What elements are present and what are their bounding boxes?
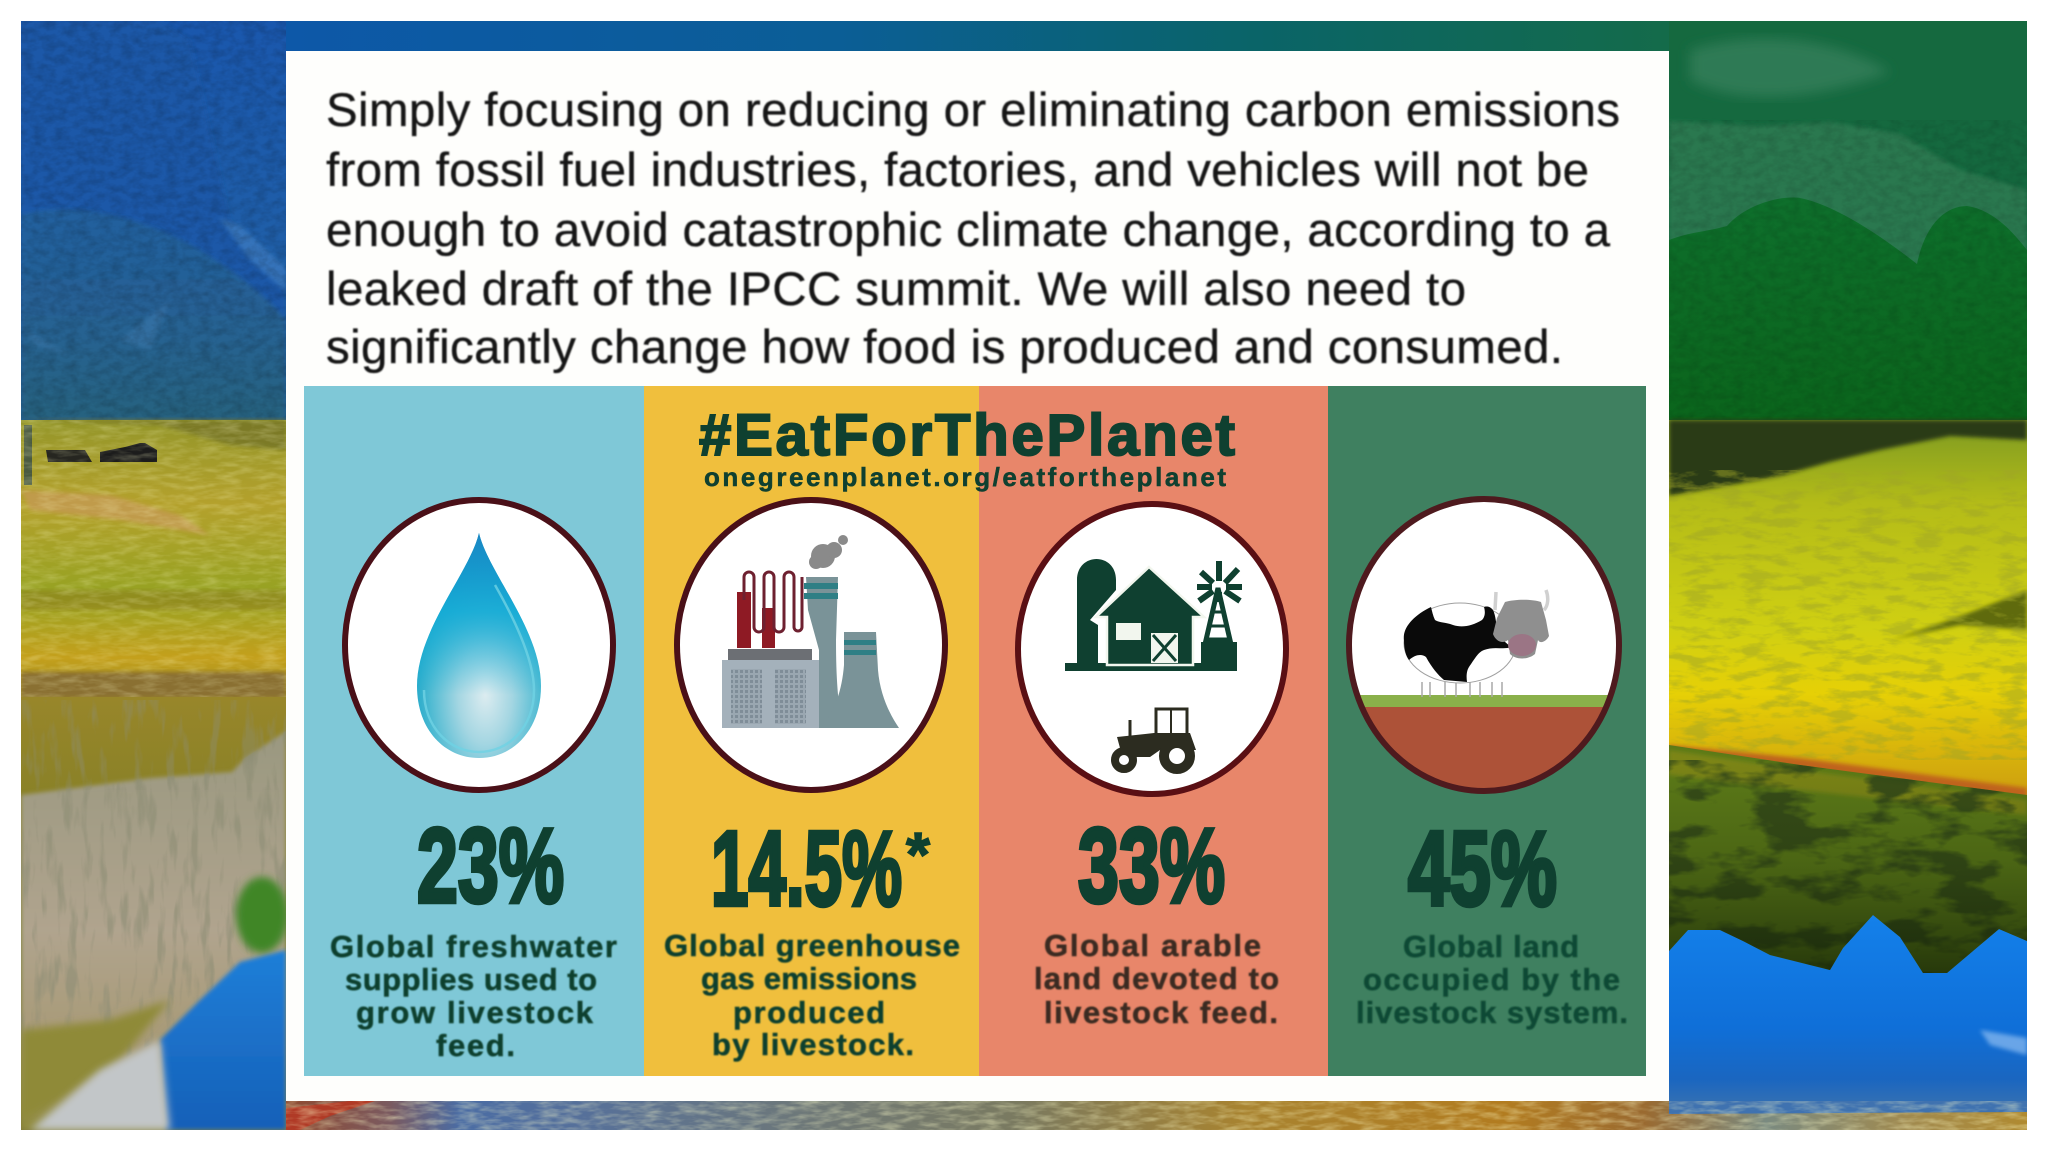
caption: freshwater: supplies used to	[345, 962, 597, 997]
background: right lake with tree reflection	[1669, 745, 2027, 1110]
caption: arable land: Global arable	[1044, 928, 1261, 963]
caption: freshwater	[330, 929, 617, 1063]
infographic panel	[304, 386, 1646, 1076]
caption: freshwater: Global freshwater	[330, 929, 617, 964]
cow head	[1493, 600, 1549, 658]
panel: greenhouse gas column	[644, 386, 979, 1076]
caption: land occupied: occupied by the	[1363, 962, 1620, 997]
red chimneys	[737, 592, 775, 648]
stat: 23%: 23%	[417, 807, 564, 925]
panel: land occupied column	[1328, 386, 1646, 1076]
panel: arable land column	[979, 386, 1328, 1076]
roof and building	[728, 649, 812, 660]
background: bottom grass strip	[286, 1101, 2027, 1130]
caption: freshwater: grow livestock	[356, 995, 594, 1030]
caption: arable land: livestock feed.	[1044, 995, 1278, 1030]
stat: 14.5%*: *	[906, 821, 931, 890]
caption: land occupied	[1356, 929, 1628, 1030]
icon: farm in circle	[1018, 504, 1286, 794]
caption: greenhouse	[664, 928, 960, 1062]
caption: greenhouse: by livestock.	[712, 1027, 914, 1062]
short tower	[820, 632, 899, 728]
caption: freshwater: feed.	[436, 1028, 515, 1063]
caption: arable land: land devoted to	[1034, 961, 1279, 996]
heading: hashtag: #EatForThePlanet	[699, 403, 1235, 468]
caption: greenhouse: Global greenhouse	[664, 928, 960, 963]
panel: freshwater column	[304, 386, 644, 1076]
background: top band gradient	[286, 21, 1669, 51]
intro paragraph: leaked draft of the IPCC summit. We will also need to	[326, 263, 1466, 316]
tall stack	[806, 577, 842, 728]
background: right meadow	[1669, 420, 2027, 806]
pipes	[744, 572, 802, 632]
caption: greenhouse: produced	[733, 995, 885, 1030]
stat: 14.5%*: 14.5%	[711, 810, 902, 928]
intro paragraph: significantly change how food is produced and consumed.	[326, 321, 1563, 374]
cow body	[1404, 603, 1516, 683]
white card	[286, 51, 1669, 1101]
caption: land occupied: Global land	[1403, 929, 1579, 964]
intro paragraph: Simply focusing on reducing or eliminating carbon emissions	[326, 84, 1620, 137]
caption: greenhouse: gas emissions	[701, 961, 917, 996]
icon: factory in circle	[677, 500, 945, 790]
stat: 33%: 33%	[1078, 807, 1225, 925]
caption: land occupied: livestock system.	[1356, 995, 1628, 1030]
intro paragraph: from fossil fuel industries, factories, and vehicles will not be	[326, 144, 1589, 197]
stat: 45%: 45%	[1408, 810, 1557, 928]
caption: arable land	[1034, 928, 1279, 1030]
intro paragraph	[326, 84, 1620, 374]
icon: water drop in circle	[345, 500, 613, 790]
heading: url: onegreenplanet.org/eatfortheplanet	[704, 462, 1226, 492]
tractor	[1115, 709, 1196, 769]
icon: cow on land in circle	[1340, 499, 1630, 802]
background: upper left blue tinted mountain	[21, 21, 286, 420]
background: upper right green tinted mountains and trees	[1669, 21, 2027, 420]
cow patches	[1404, 606, 1511, 682]
background: left lake reflection	[21, 697, 288, 1130]
smoke	[809, 535, 848, 569]
background: left meadow with chalets	[21, 420, 286, 700]
cow legs	[1422, 682, 1502, 697]
intro paragraph: enough to avoid catastrophic climate change, according to a	[326, 204, 1611, 257]
farm buildings	[1065, 559, 1242, 671]
